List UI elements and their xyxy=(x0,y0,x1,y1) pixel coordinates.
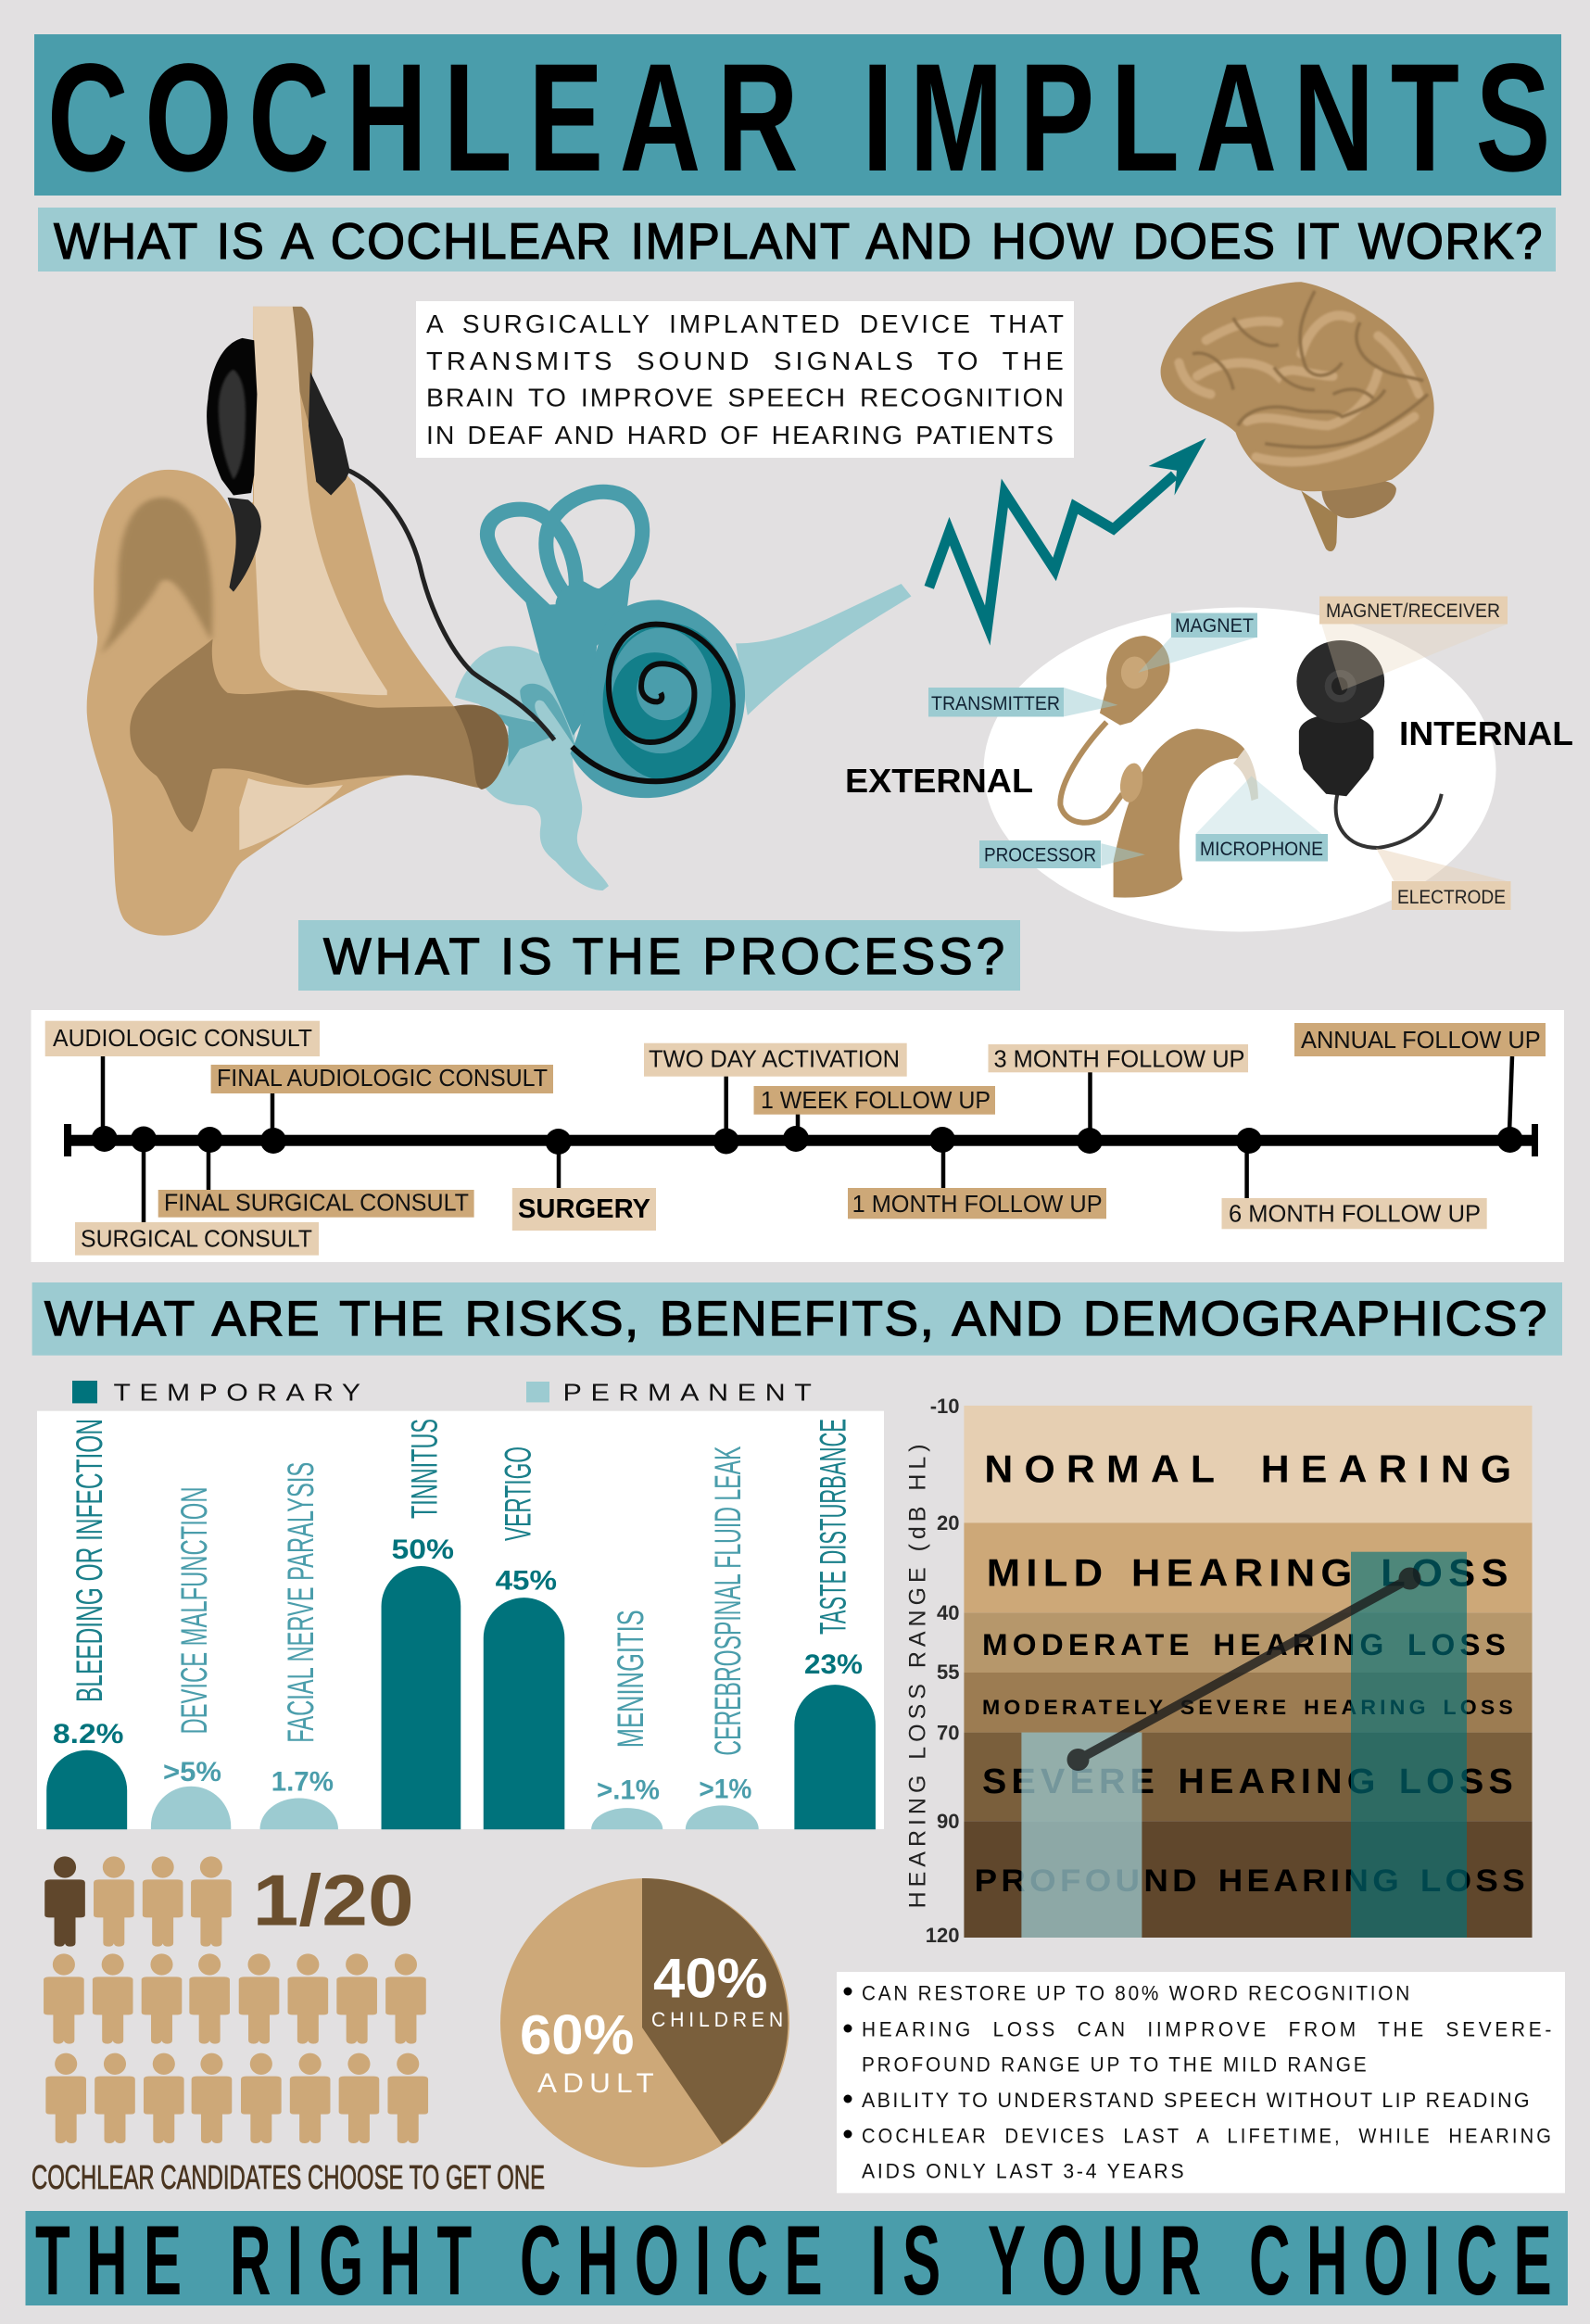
bar values: >.1% xyxy=(597,1775,660,1805)
axis ticks: 120 xyxy=(926,1924,960,1947)
bar labels: BLEEDING OR INFECTION xyxy=(69,1419,110,1702)
milestone: 1 week follow up: 1 WEEK FOLLOW UP xyxy=(761,1086,991,1114)
milestone: 3 month follow up: 3 MONTH FOLLOW UP xyxy=(993,1045,1245,1073)
axis title: HEARING LOSS RANGE (dB HL) xyxy=(904,1439,930,1908)
bar labels: TASTE DISTURBANCE xyxy=(813,1419,853,1635)
band labels: MODERATELY SEVERE HEARING LOSS xyxy=(982,1696,1517,1719)
pie chart: adult vs children: 40% xyxy=(653,1948,767,2010)
bar values: >5% xyxy=(163,1757,221,1787)
legend: PERMANENT xyxy=(563,1381,821,1407)
band labels: MILD HEARING LOSS xyxy=(987,1550,1514,1594)
bar labels: MENINGITIS xyxy=(611,1610,651,1748)
panel: benefits list: HEARING LOSS CAN IIMPROVE FROM THE SEVERE- xyxy=(862,2017,1555,2040)
milestone: surgery: SURGERY xyxy=(518,1194,650,1224)
text block: definition: TRANSMITS SOUND SIGNALS TO THE xyxy=(426,347,1067,375)
after-implant bar xyxy=(1351,1552,1467,1938)
band labels: SEVERE HEARING LOSS xyxy=(982,1762,1518,1801)
milestone: two day activation: TWO DAY ACTIVATION xyxy=(649,1045,900,1073)
panel: benefits list: AIDS ONLY LAST 3-4 YEARS xyxy=(862,2160,1186,2183)
middle ear xyxy=(455,646,609,890)
bar values: 50% xyxy=(391,1535,454,1565)
device illustrations xyxy=(1060,625,1508,898)
callout wedges xyxy=(1064,625,1508,881)
label: magnet: MAGNET xyxy=(1175,615,1254,637)
label: transmitter: TRANSMITTER xyxy=(931,693,1060,714)
axis ticks: -10 xyxy=(930,1395,960,1418)
panel: risks bar chart xyxy=(37,1411,884,1829)
milestone: annual follow up: ANNUAL FOLLOW UP xyxy=(1301,1026,1541,1054)
before-implant bar xyxy=(1021,1733,1142,1938)
panel: process timeline xyxy=(32,1010,1564,1262)
bar values: 8.2% xyxy=(53,1719,124,1749)
pie chart: adult vs children xyxy=(500,1878,789,2167)
semicircular canals xyxy=(487,492,642,612)
milestone: surgical consult: SURGICAL CONSULT xyxy=(81,1225,312,1253)
bar values xyxy=(53,1535,863,1805)
bar labels: CEREBROSPINAL FLUID LEAK xyxy=(708,1446,749,1756)
panel: implant parts xyxy=(845,597,1573,932)
pie chart: adult vs children: ADULT xyxy=(537,2068,660,2099)
bar values: 23% xyxy=(804,1649,863,1680)
text block: definition: IN DEAF AND HARD OF HEARING PATIENTS xyxy=(426,421,1055,449)
outer ear xyxy=(87,307,509,936)
band labels: MODERATE HEARING LOSS xyxy=(982,1628,1510,1661)
improvement line xyxy=(1067,1568,1421,1771)
bar values: >1% xyxy=(699,1775,751,1805)
bar labels xyxy=(69,1419,853,1756)
pictogram: 1 in 20 people xyxy=(44,1856,428,2143)
bar values: 45% xyxy=(496,1566,557,1596)
band labels: PROFOUND HEARING LOSS xyxy=(975,1863,1529,1899)
external device xyxy=(1060,636,1258,898)
label: transmitter xyxy=(928,688,1064,717)
heading: what is the process: WHAT IS THE PROCESS? xyxy=(323,927,1008,985)
timeline axis xyxy=(64,1124,1538,1156)
pie chart: adult vs children: 60% xyxy=(520,2004,634,2066)
axis ticks: 20 xyxy=(937,1511,960,1535)
icon: signal arrow xyxy=(929,438,1206,625)
band labels xyxy=(975,1447,1529,1899)
implant: transmitter and receiver xyxy=(207,338,554,740)
illustration: ear with implant and cochlea xyxy=(87,307,911,936)
label: processor: PROCESSOR xyxy=(984,845,1096,865)
text block: definition xyxy=(416,301,1074,458)
label: electrode: ELECTRODE xyxy=(1397,887,1506,908)
label: internal: INTERNAL xyxy=(1399,714,1573,752)
band labels: NORMAL HEARING xyxy=(984,1447,1522,1490)
milestone: surgery xyxy=(512,1188,656,1231)
text block: definition: A SURGICALLY IMPLANTED DEVICE THAT xyxy=(426,309,1066,338)
heading: risks, benefits, demographics: WHAT ARE THE RISKS, BENEFITS, AND DEMOGRAPHICS? xyxy=(44,1292,1548,1346)
chart: hearing loss range xyxy=(904,1395,1533,1947)
axis ticks: 40 xyxy=(937,1601,960,1624)
axis ticks: 70 xyxy=(937,1722,960,1744)
milestone: audiologic consult: AUDIOLOGIC CONSULT xyxy=(53,1024,312,1052)
bar values: 1.7% xyxy=(271,1766,334,1798)
cochlea spiral xyxy=(570,600,745,798)
axis ticks: 90 xyxy=(937,1810,960,1833)
panel: benefits list: ABILITY TO UNDERSTAND SPEECH WITHOUT LIP READING xyxy=(862,2089,1532,2112)
bar labels: TINNITUS xyxy=(404,1419,445,1519)
milestone: 6 month follow up: 6 MONTH FOLLOW UP xyxy=(1229,1199,1481,1227)
bar labels: DEVICE MALFUNCTION xyxy=(174,1486,215,1735)
timeline stems xyxy=(103,1056,1512,1222)
auditory nerve xyxy=(736,584,911,715)
label: magnet/receiver: MAGNET/RECEIVER xyxy=(1326,600,1500,622)
pie chart: adult vs children: CHILDREN xyxy=(651,2008,788,2031)
panel: benefits list xyxy=(837,1972,1565,2193)
label: microphone: MICROPHONE xyxy=(1200,839,1323,860)
legend xyxy=(72,1381,821,1407)
caption: candidates: COCHLEAR CANDIDATES CHOOSE TO GET ONE xyxy=(32,2158,545,2196)
milestone: final audiologic consult: FINAL AUDIOLOGIC CONSULT xyxy=(217,1064,548,1092)
milestone: 1 month follow up: 1 MONTH FOLLOW UP xyxy=(852,1190,1103,1218)
illustration: brain xyxy=(1161,282,1434,551)
stat: 1/20: 1/20 xyxy=(253,1859,414,1940)
hearing bands xyxy=(964,1406,1533,1938)
axis ticks: 55 xyxy=(937,1661,960,1684)
panel: benefits list: CAN RESTORE UP TO 80% WORD RECOGNITION xyxy=(862,1981,1412,2004)
label: external: EXTERNAL xyxy=(845,762,1033,800)
bars xyxy=(46,1566,876,1829)
internal device xyxy=(1296,640,1442,848)
heading: what is a cochlear implant: WHAT IS A COCHLEAR IMPLANT AND HOW DOES IT WORK? xyxy=(54,212,1544,270)
bar labels: FACIAL NERVE PARALYSIS xyxy=(281,1462,322,1743)
milestone: final surgical consult: FINAL SURGICAL CONSULT xyxy=(164,1189,469,1217)
panel: benefits list: PROFOUND RANGE UP TO THE MILD RANGE xyxy=(862,2052,1369,2076)
label: electrode xyxy=(1392,881,1510,910)
vestibule xyxy=(523,565,632,736)
bar labels: VERTIGO xyxy=(498,1446,539,1541)
axis ticks xyxy=(926,1395,960,1947)
text block: definition: BRAIN TO IMPROVE SPEECH RECOGNITION xyxy=(426,384,1066,411)
legend: TEMPORARY xyxy=(113,1381,369,1407)
